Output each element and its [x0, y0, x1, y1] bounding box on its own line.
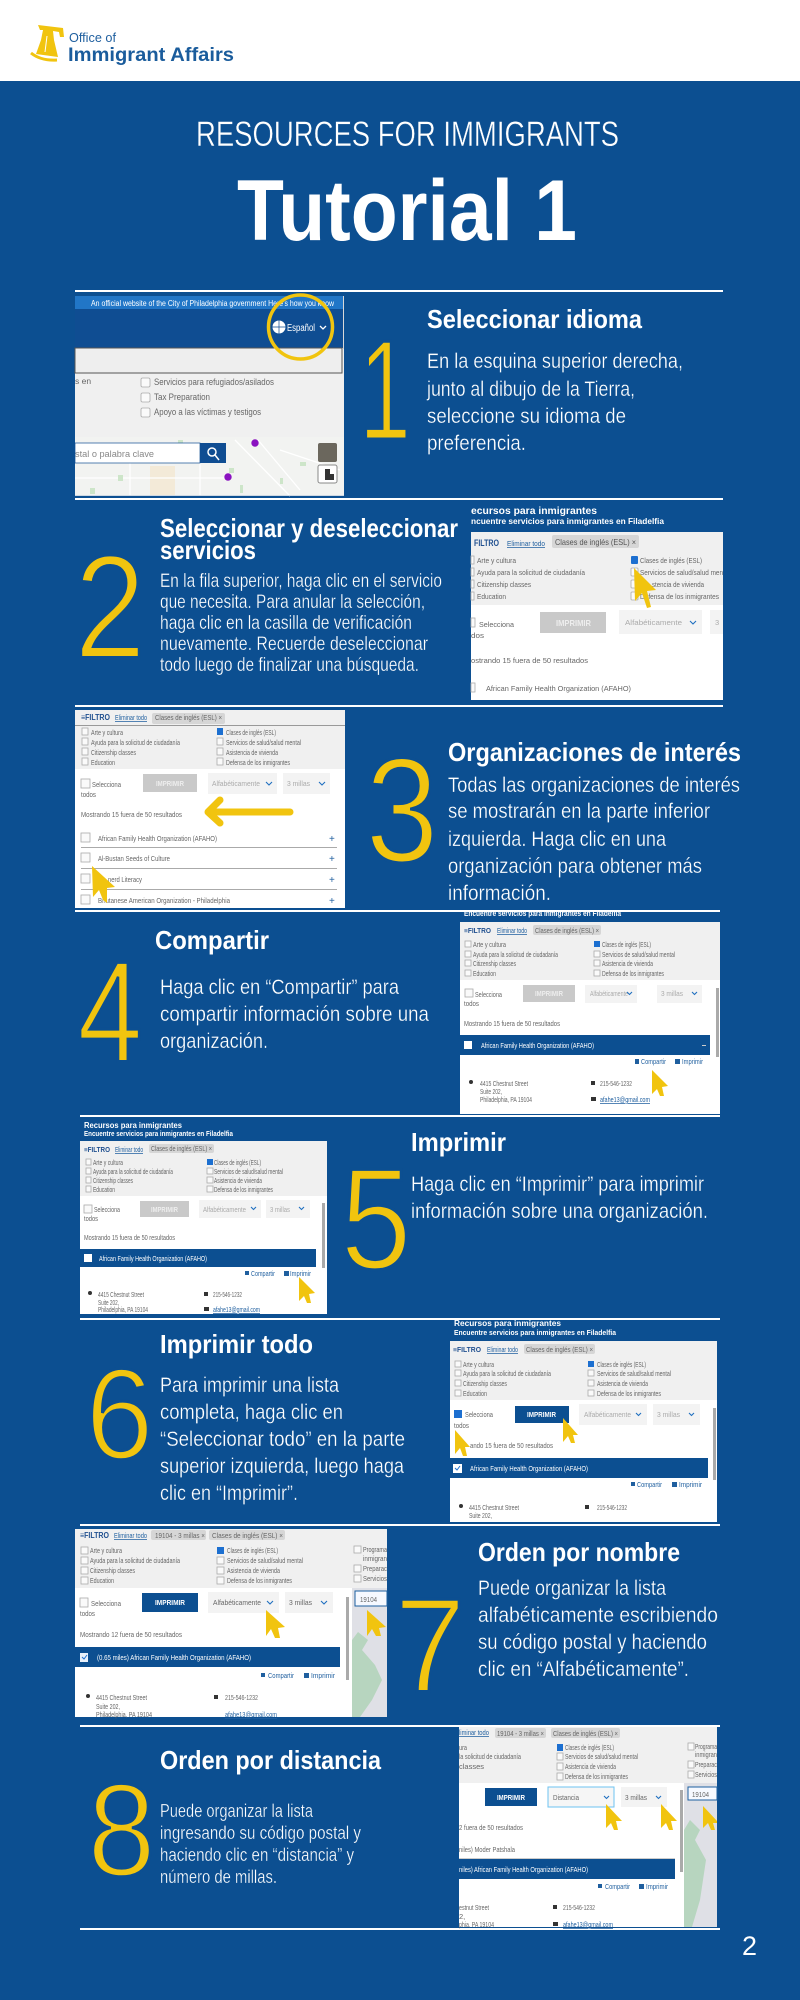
- step 3 text: se mostrarán en la parte inferior: [448, 799, 710, 823]
- step 3 screenshot: Alfabéticamente: [212, 779, 260, 788]
- step 2 screenshot: Clases de inglés (ESL): [640, 556, 702, 565]
- step 6 screenshot: Suite 202,: [469, 1511, 492, 1520]
- step 6 screenshot: Clases de inglés (ESL) ×: [526, 1345, 593, 1354]
- step 3 screenshot: Mostrando 15 fuera de 50 resultados: [81, 810, 182, 819]
- step 8 screenshot: 19104 - 3 millas ×: [497, 1729, 544, 1738]
- header band with logo: [0, 0, 800, 81]
- step 5 screenshot: ≡FILTRO: [84, 1145, 110, 1154]
- title: RESOURCES FOR IMMIGRANTS: [196, 115, 619, 154]
- step 7 text: [478, 1576, 718, 1681]
- step 4 text: compartir información sobre una: [160, 1002, 429, 1026]
- step 3 text: organización para obtener más: [448, 854, 702, 878]
- step 5 screenshot: Servicios de salud/salud mental: [214, 1167, 283, 1176]
- step 5 screenshot: African Family Health Organization (AFAHO): [99, 1254, 207, 1263]
- step 1 screenshot: Español: [287, 323, 315, 334]
- step 8 screenshot: IMPRIMIR: [497, 1795, 525, 1802]
- step 3 screenshot: +: [329, 854, 335, 865]
- step 2 screenshot: Alfabéticamente: [625, 618, 682, 627]
- step 3 screenshot: Selecciona: [92, 780, 122, 789]
- step 6 screenshot: 215-546-1232: [597, 1503, 627, 1512]
- step 7 text: Puede organizar la lista: [478, 1576, 666, 1600]
- step 2 screenshot: Citizenship classes: [477, 580, 531, 589]
- step 2 text: [160, 571, 442, 676]
- highlight circle: [268, 295, 332, 359]
- step 8 screenshot: 3 millas: [625, 1793, 647, 1802]
- step 8 text: ingresando su código postal y: [160, 1823, 361, 1843]
- step 4 screenshot: Citizenship classes: [473, 959, 516, 968]
- step 2 text: que necesita. Para anular la selección,: [160, 592, 425, 613]
- cursor: [455, 1430, 470, 1456]
- cursor: [299, 1277, 315, 1303]
- step 7 screenshot: Imprimir: [311, 1671, 335, 1680]
- cursor: [92, 866, 115, 903]
- step 3 screenshot: [75, 710, 345, 908]
- step 1 screenshot: s en: [75, 376, 91, 386]
- number 5: 5: [340, 1138, 412, 1300]
- step 2 text: haga clic en la casilla de verificación: [160, 613, 412, 634]
- step 2 screenshot: IMPRIMIR: [556, 618, 591, 628]
- step 8 screenshot: estnut Street: [459, 1903, 490, 1912]
- step 3 screenshot: Asistencia de vivienda: [226, 748, 279, 757]
- step 4 screenshot: African Family Health Organization (AFAHO): [481, 1041, 594, 1050]
- step 7 screenshot: Suite 202,: [96, 1702, 120, 1711]
- step 7 screenshot: Education: [90, 1576, 114, 1585]
- step 5 screenshot: afahe13@gmail.com: [213, 1305, 260, 1314]
- page number: 2: [742, 1931, 757, 1961]
- logo text: Office of: Office of: [69, 30, 116, 45]
- step 4 screenshot: Encuentre servicios para inmigrantes en Filadelfia: [464, 909, 621, 918]
- step 7 screenshot: Philadelphia, PA 19104: [96, 1710, 152, 1719]
- step 4 text: [160, 975, 429, 1053]
- step 4 screenshot: Imprimir: [682, 1057, 703, 1066]
- cursor: [652, 1070, 668, 1096]
- step 4 screenshot: Philadelphia, PA 19104: [480, 1095, 532, 1104]
- step 6 screenshot: Ayuda para la solicitud de ciudadanía: [463, 1369, 552, 1378]
- cursor: [634, 568, 656, 608]
- step 8 screenshot: Imprimir: [646, 1882, 668, 1891]
- title: [196, 115, 619, 259]
- step 8 screenshot: niles) Moder Patshala: [459, 1845, 516, 1854]
- step 4 screenshot: Suite 202,: [480, 1087, 502, 1096]
- step 6 screenshot: Recursos para inmigrantes: [454, 1319, 562, 1328]
- step 2 screenshot: Eliminar todo: [507, 539, 545, 548]
- step 1 screenshot: Servicios para refugiados/asilados: [154, 377, 274, 387]
- step 4 screenshot: Ayuda para la solicitud de ciudadanía: [473, 950, 559, 959]
- step 3 screenshot: ≡FILTRO: [81, 713, 110, 722]
- step 7 screenshot: Asistencia de vivienda: [227, 1566, 281, 1575]
- number 6: 6: [86, 1342, 154, 1486]
- logo text: Immigrant Affairs: Immigrant Affairs: [68, 45, 234, 66]
- step 7 screenshot: ≡FILTRO: [80, 1531, 109, 1540]
- step 7 screenshot: Alfabéticamente: [213, 1598, 261, 1607]
- step 3 screenshot: Al-Bustan Seeds of Culture: [98, 854, 170, 863]
- step 8 screenshot: niles) African Family Health Organization (AFAHO): [459, 1865, 588, 1874]
- step 2 screenshot: 3: [715, 618, 719, 627]
- number 4: 4: [78, 932, 142, 1092]
- step 6 screenshot: [450, 1319, 717, 1522]
- step 2 heading: Seleccionar y deseleccionar: [160, 513, 458, 543]
- step 5 screenshot: Clases de inglés (ESL): [214, 1158, 261, 1167]
- step 5 text: [411, 1172, 708, 1223]
- step 3 text: Todas las organizaciones de interés: [448, 773, 740, 797]
- step 2 screenshot: FILTRO: [474, 538, 499, 548]
- step 6 text: superior izquierda, luego haga: [160, 1454, 404, 1478]
- step 6 screenshot: 3 millas: [657, 1410, 680, 1419]
- cursor: [563, 1418, 578, 1443]
- step 8 text: Puede organizar la lista: [160, 1801, 314, 1821]
- step 3 text: [448, 773, 740, 905]
- step 5 text: Haga clic en “Imprimir” para imprimir: [411, 1172, 704, 1196]
- step 6 screenshot: Alfabéticamente: [584, 1410, 631, 1419]
- step 8 screenshot: 19104: [692, 1790, 709, 1799]
- step 5 screenshot: todos: [84, 1214, 98, 1223]
- step 4 screenshot: Clases de inglés (ESL) ×: [535, 926, 599, 935]
- step 7 screenshot: todos: [80, 1609, 95, 1618]
- step 5 screenshot: 215-546-1232: [213, 1290, 242, 1299]
- step 4 screenshot: Eliminar todo: [497, 926, 527, 935]
- step 3 heading: Organizaciones de interés: [448, 737, 741, 767]
- step 5 screenshot: Citizenship classes: [93, 1176, 133, 1185]
- step 7 screenshot: Compartir: [268, 1671, 294, 1680]
- step 5 screenshot: IMPRIMIR: [151, 1207, 178, 1214]
- step 3 screenshot: Clases de inglés (ESL) ×: [155, 713, 222, 722]
- step 1 text: junto al dibujo de la Tierra,: [426, 377, 635, 401]
- step 6 screenshot: Education: [463, 1389, 487, 1398]
- step 8 screenshot: [459, 1727, 718, 1929]
- step 6 screenshot: Arte y cultura: [463, 1360, 495, 1369]
- number 1: 1: [359, 311, 411, 470]
- step 3 screenshot: nerd Literacy: [108, 875, 142, 884]
- step 7 screenshot: 19104 - 3 millas ×: [155, 1531, 205, 1540]
- step 7 screenshot: Servicios: [363, 1574, 387, 1583]
- step 8 screenshot: liminar todo: [459, 1728, 489, 1737]
- step 2 screenshot: Clases de inglés (ESL) ×: [555, 537, 636, 547]
- step 6 screenshot: Eliminar todo: [487, 1345, 518, 1354]
- step 2 screenshot: [471, 506, 723, 700]
- step 7 screenshot: Selecciona: [91, 1599, 122, 1608]
- step 2 heading: [160, 513, 458, 565]
- step 2 screenshot: dos: [471, 631, 484, 640]
- step 7 screenshot: Clases de inglés (ESL): [227, 1546, 278, 1555]
- step 2 screenshot: Education: [477, 592, 506, 601]
- step 4 screenshot: [460, 909, 720, 1114]
- step 7 screenshot: IMPRIMIR: [155, 1598, 185, 1607]
- step 1 screenshot: [75, 296, 344, 496]
- step 5 screenshot: 4415 Chestnut Street: [98, 1290, 145, 1299]
- step 3 screenshot: Bhutanese American Organization - Philadelphia: [98, 896, 231, 905]
- step 1 text: [426, 349, 683, 455]
- step 6 screenshot: Citizenship classes: [463, 1379, 507, 1388]
- step 8 text: [160, 1801, 361, 1887]
- step 2 screenshot: ecursos para inmigrantes: [471, 506, 597, 517]
- step 8 screenshot: 2,: [459, 1912, 465, 1921]
- step 7 screenshot: Arte y cultura: [90, 1546, 123, 1555]
- step 3 screenshot: Clases de inglés (ESL): [226, 728, 276, 737]
- step 6 screenshot: Servicios de salud/salud mental: [597, 1369, 671, 1378]
- step 4 text: organización.: [160, 1029, 268, 1053]
- step 8 screenshot: Programa: [695, 1742, 718, 1751]
- step 3 screenshot: Eliminar todo: [115, 713, 147, 722]
- step 3 text: izquierda. Haga clic en una: [448, 827, 666, 851]
- step 4 screenshot: todos: [464, 999, 479, 1008]
- step 3 screenshot: +: [329, 875, 335, 886]
- step 6 text: completa, haga clic en: [160, 1400, 343, 1424]
- step 7 screenshot: 215-546-1232: [225, 1693, 258, 1702]
- step 2 screenshot: Ayuda para la solicitud de ciudadanía: [477, 568, 586, 577]
- step 3 screenshot: Ayuda para la solicitud de ciudadanía: [91, 738, 181, 747]
- arrow: pointing left: [208, 800, 290, 823]
- step 7 screenshot: Citizenship classes: [90, 1566, 135, 1575]
- step 7 screenshot: Eliminar todo: [114, 1531, 147, 1540]
- step 8 screenshot: 215-546-1232: [563, 1903, 595, 1912]
- step 1 text: preferencia.: [427, 431, 526, 455]
- step 8 screenshot: Clases de inglés (ESL) ×: [553, 1729, 618, 1738]
- step 5 screenshot: Selecciona: [94, 1205, 121, 1214]
- step 7 screenshot: 4415 Chestnut Street: [96, 1693, 148, 1702]
- step 7 screenshot: [75, 1529, 388, 1719]
- step 5 heading: Imprimir: [411, 1127, 506, 1157]
- step 6 text: “Seleccionar todo” en la parte: [160, 1427, 405, 1451]
- step 3 screenshot: +: [329, 834, 335, 845]
- step 5 text: información sobre una organización.: [411, 1199, 708, 1223]
- step 6 screenshot: ando 15 fuera de 50 resultados: [470, 1441, 553, 1450]
- icon: liberty bell: [31, 25, 64, 60]
- step 8 screenshot: Defensa de los inmigrantes: [565, 1772, 628, 1781]
- step 4 screenshot: Selecciona: [475, 990, 503, 999]
- step 2 screenshot: ncuentre servicios para inmigrantes en Filadelfia: [471, 516, 664, 526]
- step 8 screenshot: Preparac: [695, 1760, 717, 1769]
- step 1 screenshot: An official website of the City of Philadelphia government Here's how you know: [91, 299, 334, 308]
- step 8 screenshot: inmigran: [695, 1750, 717, 1759]
- step 5 screenshot: Asistencia de vivienda: [214, 1176, 263, 1185]
- step 6 screenshot: todos: [454, 1421, 469, 1430]
- step 8 screenshot: Compartir: [605, 1882, 630, 1891]
- step 7 screenshot: Defensa de los inmigrantes: [227, 1576, 292, 1585]
- step 7 screenshot: inmigran: [363, 1554, 387, 1563]
- step 7 heading: Orden por nombre: [478, 1537, 680, 1567]
- step 6 screenshot: Clases de inglés (ESL): [597, 1360, 646, 1369]
- step 1 text: En la esquina superior derecha,: [427, 349, 683, 373]
- step 2 screenshot: Defensa de los inmigrantes: [640, 592, 719, 601]
- step 5 screenshot: Recursos para inmigrantes: [84, 1121, 183, 1130]
- step 6 screenshot: Encuentre servicios para inmigrantes en Filadelfia: [454, 1328, 617, 1337]
- step 4 screenshot: 4415 Chestnut Street: [480, 1079, 529, 1088]
- step 4 screenshot: Arte y cultura: [473, 940, 507, 949]
- step 7 text: clic en “Alfabéticamente”.: [478, 1657, 689, 1681]
- step 5 screenshot: [80, 1121, 327, 1314]
- step 6 text: Para imprimir una lista: [160, 1373, 339, 1397]
- step 8 text: haciendo clic en “distancia” y: [160, 1845, 354, 1865]
- step 4 screenshot: Alfabéticamente: [590, 989, 628, 998]
- step 2 screenshot: Selecciona: [479, 620, 515, 629]
- step 7 text: su código postal y haciendo: [478, 1630, 707, 1654]
- step 5 screenshot: 3 millas: [270, 1205, 290, 1214]
- step 6 text: [160, 1373, 405, 1505]
- step 5 screenshot: Eliminar todo: [115, 1145, 143, 1154]
- step 8 screenshot: Servicios de salud/salud mental: [565, 1752, 638, 1761]
- step 4 screenshot: afahe13@gmail.com: [600, 1095, 650, 1104]
- step 2 heading: servicios: [160, 535, 256, 565]
- step 2 text: nuevamente. Recuerde deseleccionar: [160, 634, 429, 655]
- number 7: 7: [394, 1572, 466, 1720]
- step 2 screenshot: African Family Health Organization (AFAHO): [486, 684, 631, 693]
- step 8 screenshot: la solicitud de ciudadanía: [459, 1752, 522, 1761]
- step 5 screenshot: Suite 202,: [98, 1298, 119, 1307]
- step 7 screenshot: Programa: [363, 1545, 388, 1554]
- step 8 heading: Orden por distancia: [160, 1745, 381, 1775]
- step 6 screenshot: Defensa de los inmigrantes: [597, 1389, 661, 1398]
- step 1 heading: Seleccionar idioma: [427, 304, 642, 334]
- step 7 screenshot: Clases de inglés (ESL) ×: [212, 1531, 283, 1540]
- step 5 screenshot: Encuentre servicios para inmigrantes en Filadelfia: [84, 1131, 233, 1138]
- step 7 screenshot: Ayuda para la solicitud de ciudadanía: [90, 1556, 181, 1565]
- step 8 screenshot: Asistencia de vivienda: [565, 1762, 617, 1771]
- step 4 screenshot: Education: [473, 969, 496, 978]
- step 4 heading: Compartir: [155, 925, 269, 955]
- step 7 screenshot: Preparac: [363, 1564, 387, 1573]
- step 6 heading: Imprimir todo: [160, 1329, 313, 1359]
- number 8: 8: [88, 1756, 156, 1904]
- number 3: 3: [366, 726, 438, 894]
- cursor: [661, 1804, 677, 1830]
- step 2 screenshot: ostrando 15 fuera de 50 resultados: [471, 656, 588, 665]
- step 8 screenshot: phia, PA 19104: [459, 1920, 494, 1929]
- step 6 screenshot: Selecciona: [465, 1410, 494, 1419]
- step 3 screenshot: Defensa de los inmigrantes: [226, 758, 290, 767]
- step 1 screenshot: Apoyo a las víctimas y testigos: [154, 407, 261, 417]
- step 3 screenshot: Arte y cultura: [91, 728, 124, 737]
- step 3 screenshot: Citizenship classes: [91, 748, 136, 757]
- step 3 screenshot: African Family Health Organization (AFAHO): [98, 834, 217, 843]
- step 5 screenshot: Education: [93, 1185, 115, 1194]
- cursor: [367, 1610, 386, 1636]
- step 6 screenshot: ≡FILTRO: [453, 1345, 481, 1354]
- step 8 screenshot: ura: [459, 1743, 468, 1752]
- step 3 screenshot: +: [329, 896, 335, 907]
- step 8 text: número de millas.: [160, 1867, 277, 1887]
- step 7 screenshot: afahe13@gmail.com: [225, 1710, 277, 1719]
- step 8 screenshot: Servicios: [695, 1770, 717, 1779]
- step 8 screenshot: afahe13@gmail.com: [563, 1920, 613, 1929]
- step 6 screenshot: Asistencia de vivienda: [597, 1379, 649, 1388]
- step 8 screenshot: Distancia: [553, 1793, 580, 1802]
- step 5 screenshot: Ayuda para la solicitud de ciudadanía: [93, 1167, 174, 1176]
- step 5 screenshot: Clases de inglés (ESL) ×: [151, 1144, 212, 1153]
- cursor: [606, 1804, 622, 1830]
- cursor: [266, 1610, 285, 1638]
- step 4 screenshot: IMPRIMIR: [535, 991, 563, 998]
- step 7 screenshot: 19104: [360, 1595, 377, 1604]
- step 4 screenshot: Servicios de salud/salud mental: [602, 950, 675, 959]
- step 6 screenshot: Compartir: [637, 1480, 662, 1489]
- step 2 text: todo luego de finalizar una búsqueda.: [160, 655, 419, 676]
- step 2 screenshot: stencia de vivienda: [652, 580, 705, 589]
- step 5 screenshot: Alfabéticamente: [203, 1205, 246, 1214]
- step 7 screenshot: 3 millas: [289, 1598, 312, 1607]
- step 2 screenshot: Arte y cultura: [477, 556, 517, 565]
- step 5 screenshot: Compartir: [251, 1269, 275, 1278]
- step 5 screenshot: Imprimir: [290, 1269, 311, 1278]
- step 7 screenshot: Mostrando 12 fuera de 50 resultados: [80, 1630, 182, 1639]
- step 8 screenshot: 2 fuera de 50 resultados: [459, 1823, 523, 1832]
- step 6 screenshot: 4415 Chestnut Street: [469, 1503, 520, 1512]
- step 5 screenshot: Philadelphia, PA 19104: [98, 1305, 148, 1314]
- step 4 screenshot: Mostrando 15 fuera de 50 resultados: [464, 1019, 560, 1028]
- step 2 screenshot: Servicios de salud/salud men: [640, 568, 723, 577]
- step 7 screenshot: Servicios de salud/salud mental: [227, 1556, 303, 1565]
- step 6 screenshot: African Family Health Organization (AFAHO): [470, 1464, 588, 1473]
- step 5 screenshot: Arte y cultura: [93, 1158, 124, 1167]
- step 3 screenshot: Education: [91, 758, 115, 767]
- step 3 text: información.: [448, 881, 551, 905]
- cursor: [703, 1806, 717, 1830]
- step 1 screenshot: Tax Preparation: [154, 392, 210, 402]
- step 3 screenshot: Servicios de salud/salud mental: [226, 738, 301, 747]
- step 2 text: En la fila superior, haga clic en el servicio: [160, 571, 442, 592]
- step 1 text: seleccione su idioma de: [427, 404, 626, 428]
- step 1 screenshot: stal o palabra clave: [75, 449, 154, 459]
- step 6 screenshot: Imprimir: [679, 1480, 702, 1489]
- step 3 screenshot: todos: [81, 790, 96, 799]
- step 7 screenshot: (0.65 miles) African Family Health Organization (AFAHO): [97, 1653, 251, 1662]
- step 6 screenshot: IMPRIMIR: [527, 1412, 556, 1419]
- step 4 screenshot: Defensa de los inmigrantes: [602, 969, 664, 978]
- step 7 text: alfabéticamente escribiendo: [478, 1603, 718, 1627]
- step 5 screenshot: Mostrando 15 fuera de 50 resultados: [84, 1233, 175, 1242]
- step 4 screenshot: ≡FILTRO: [464, 926, 491, 935]
- step 3 screenshot: 3 millas: [287, 779, 310, 788]
- step 4 text: Haga clic en “Compartir” para: [160, 975, 399, 999]
- step 3 screenshot: IMPRIMIR: [156, 779, 184, 788]
- step 4 screenshot: Compartir: [641, 1057, 666, 1066]
- step 4 screenshot: 3 millas: [661, 989, 683, 998]
- number 2: 2: [74, 526, 146, 690]
- step 6 text: clic en “Imprimir”.: [160, 1481, 298, 1505]
- title: Tutorial 1: [237, 163, 577, 259]
- step 4 screenshot: Clases de inglés (ESL): [602, 940, 651, 949]
- step 8 screenshot: Clases de inglés (ESL): [565, 1743, 614, 1752]
- step 4 screenshot: Asistencia de vivienda: [602, 959, 654, 968]
- step 4 screenshot: 215-546-1232: [600, 1079, 632, 1088]
- step 8 screenshot: classes: [459, 1762, 484, 1771]
- step 5 screenshot: Defensa de los inmigrantes: [214, 1185, 273, 1194]
